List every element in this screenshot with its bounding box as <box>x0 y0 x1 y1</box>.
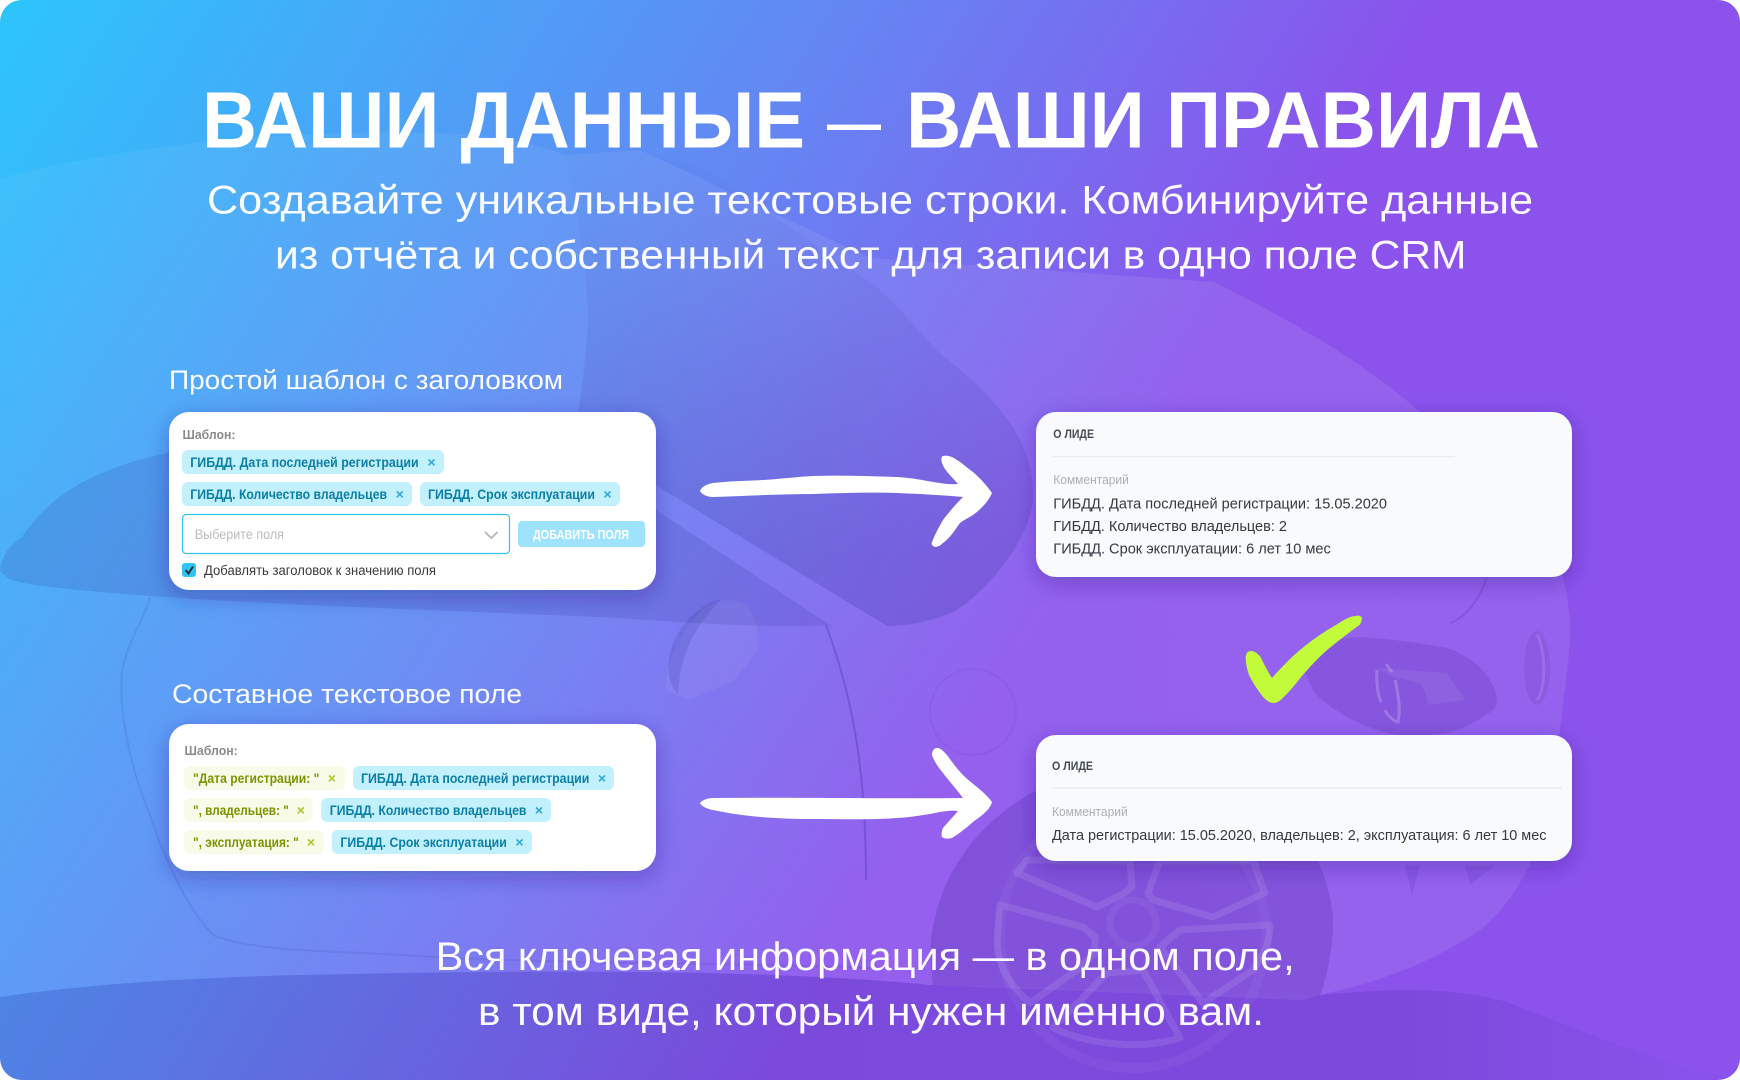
closing statement <box>436 935 1295 1034</box>
chip: registration date: ГИБДД. Дата последней регистрации <box>190 455 419 470</box>
chip row 2: ГИБДД. Количество владельцев <box>330 803 526 818</box>
title: ВАШИ ПРАВИЛА <box>906 76 1540 164</box>
checkbox with caption: Добавлять заголовок к значению поля <box>204 563 436 578</box>
chip row 3: ГИБДД. Срок эксплуатации <box>340 835 507 850</box>
title: ВАШИ ДАННЫЕ <box>202 76 805 164</box>
subtitle: из отчёта и собственный текст для записи в одно поле CRM <box>275 234 1466 278</box>
panel: simple template form <box>169 412 656 590</box>
panel: lead result composite <box>1036 735 1572 861</box>
chip row 2 <box>184 798 551 822</box>
closing statement: в том виде, который нужен именно вам. <box>478 990 1264 1034</box>
comment label: Комментарий <box>1053 472 1129 487</box>
select field: Выберите поля <box>195 527 284 542</box>
chip row 1: × <box>328 770 336 786</box>
comment value lines <box>1053 495 1387 557</box>
chip row 2: × <box>535 802 543 818</box>
chip row 2: ", владельцев: " <box>193 803 289 818</box>
template label: Шаблон: <box>182 427 236 442</box>
arrow: top <box>700 456 992 547</box>
chip row 1: × <box>598 770 606 786</box>
subtitle <box>207 178 1533 278</box>
closing statement: Вся ключевая информация — в одном поле, <box>436 935 1295 979</box>
chip: owners count: ГИБДД. Количество владельцев <box>190 487 387 502</box>
chip row 1 <box>184 766 614 790</box>
add button <box>518 521 645 547</box>
panel: lead result with headers <box>1036 412 1572 577</box>
icon: green check mark <box>1246 616 1362 703</box>
comment value lines: ГИБДД. Количество владельцев: 2 <box>1053 518 1287 535</box>
comment value lines: ГИБДД. Срок эксплуатации: 6 лет 10 мес <box>1053 540 1331 557</box>
chip: service life <box>420 482 620 506</box>
subtitle: Создавайте уникальные текстовые строки. Комбинируйте данные <box>207 178 1533 222</box>
add button: ДОБАВИТЬ ПОЛЯ <box>533 528 629 542</box>
chip row 3: × <box>307 834 315 850</box>
comment value: Дата регистрации: 15.05.2020, владельцев: 2, эксплуатация: 6 лет 10 мес <box>1052 827 1547 844</box>
chip row 1: ГИБДД. Дата последней регистрации <box>361 771 589 786</box>
chip row 2: × <box>297 802 305 818</box>
chip row 1: "Дата регистрации: " <box>193 771 319 786</box>
panel heading: О ЛИДЕ <box>1052 759 1093 773</box>
title <box>202 76 1540 164</box>
chip row 3: ", эксплуатация: " <box>193 835 299 850</box>
chip: owners count <box>182 482 412 506</box>
chip: service life: ГИБДД. Срок эксплуатации <box>428 487 595 502</box>
comment value lines: ГИБДД. Дата последней регистрации: 15.05.2020 <box>1053 495 1387 512</box>
chip: registration date: × <box>427 454 436 470</box>
chip: service life: × <box>603 486 612 502</box>
title: — <box>827 76 881 164</box>
comment label: Комментарий <box>1052 804 1128 819</box>
section heading: composite text field: Составное текстовое поле <box>172 679 522 709</box>
select field <box>182 514 510 554</box>
panel heading: О ЛИДЕ <box>1053 427 1094 441</box>
chip row 3: × <box>515 834 524 850</box>
panel: composite template form <box>169 724 656 871</box>
chip: registration date <box>182 450 444 474</box>
arrow: bottom <box>700 748 992 839</box>
template label: Шаблон: <box>184 743 238 758</box>
section heading: simple template: Простой шаблон с заголовком <box>169 365 563 395</box>
chip row 3 <box>184 830 532 854</box>
chip: owners count: × <box>396 486 404 502</box>
